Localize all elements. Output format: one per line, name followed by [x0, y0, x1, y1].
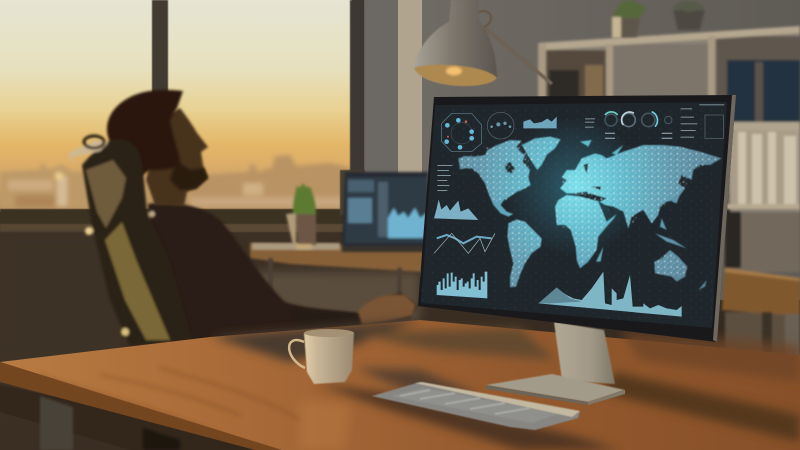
bottom area chart [538, 272, 682, 317]
monitor [418, 95, 736, 342]
small text-like stats blocks [437, 104, 724, 191]
small potted plant [286, 183, 316, 249]
world map [420, 110, 723, 327]
lower left wall shading [0, 234, 420, 369]
coffee mug [289, 329, 354, 384]
main wooden desk [0, 319, 800, 450]
left bar chart [437, 272, 487, 298]
shelf plants [612, 0, 705, 38]
shelving unit [538, 26, 800, 212]
background laptop with dashboard [342, 172, 428, 252]
second radar panel [487, 112, 514, 139]
radar panel [442, 113, 482, 152]
far desk [250, 243, 424, 303]
office chair [68, 136, 192, 346]
window frames [0, 0, 365, 232]
hair and headphones [107, 90, 183, 178]
left line chart [434, 233, 495, 253]
person [107, 90, 417, 346]
small grid panel [705, 115, 723, 138]
left area chart [434, 199, 478, 220]
gauges [605, 112, 672, 127]
desk lamp [414, 0, 552, 86]
window with sunset sky and city [0, 0, 352, 212]
wall and far desk at right [722, 206, 800, 362]
screen glow [490, 117, 657, 257]
torso [148, 203, 362, 346]
beard [170, 160, 208, 190]
neck and face [146, 108, 208, 206]
top area chart [523, 117, 557, 128]
monitor body [418, 95, 736, 342]
desk legs [40, 396, 180, 450]
monitor screen [421, 102, 727, 328]
monitor stand [486, 322, 625, 405]
keyboard [372, 382, 580, 430]
arm and hand [290, 293, 417, 335]
desk shadows [210, 319, 800, 450]
